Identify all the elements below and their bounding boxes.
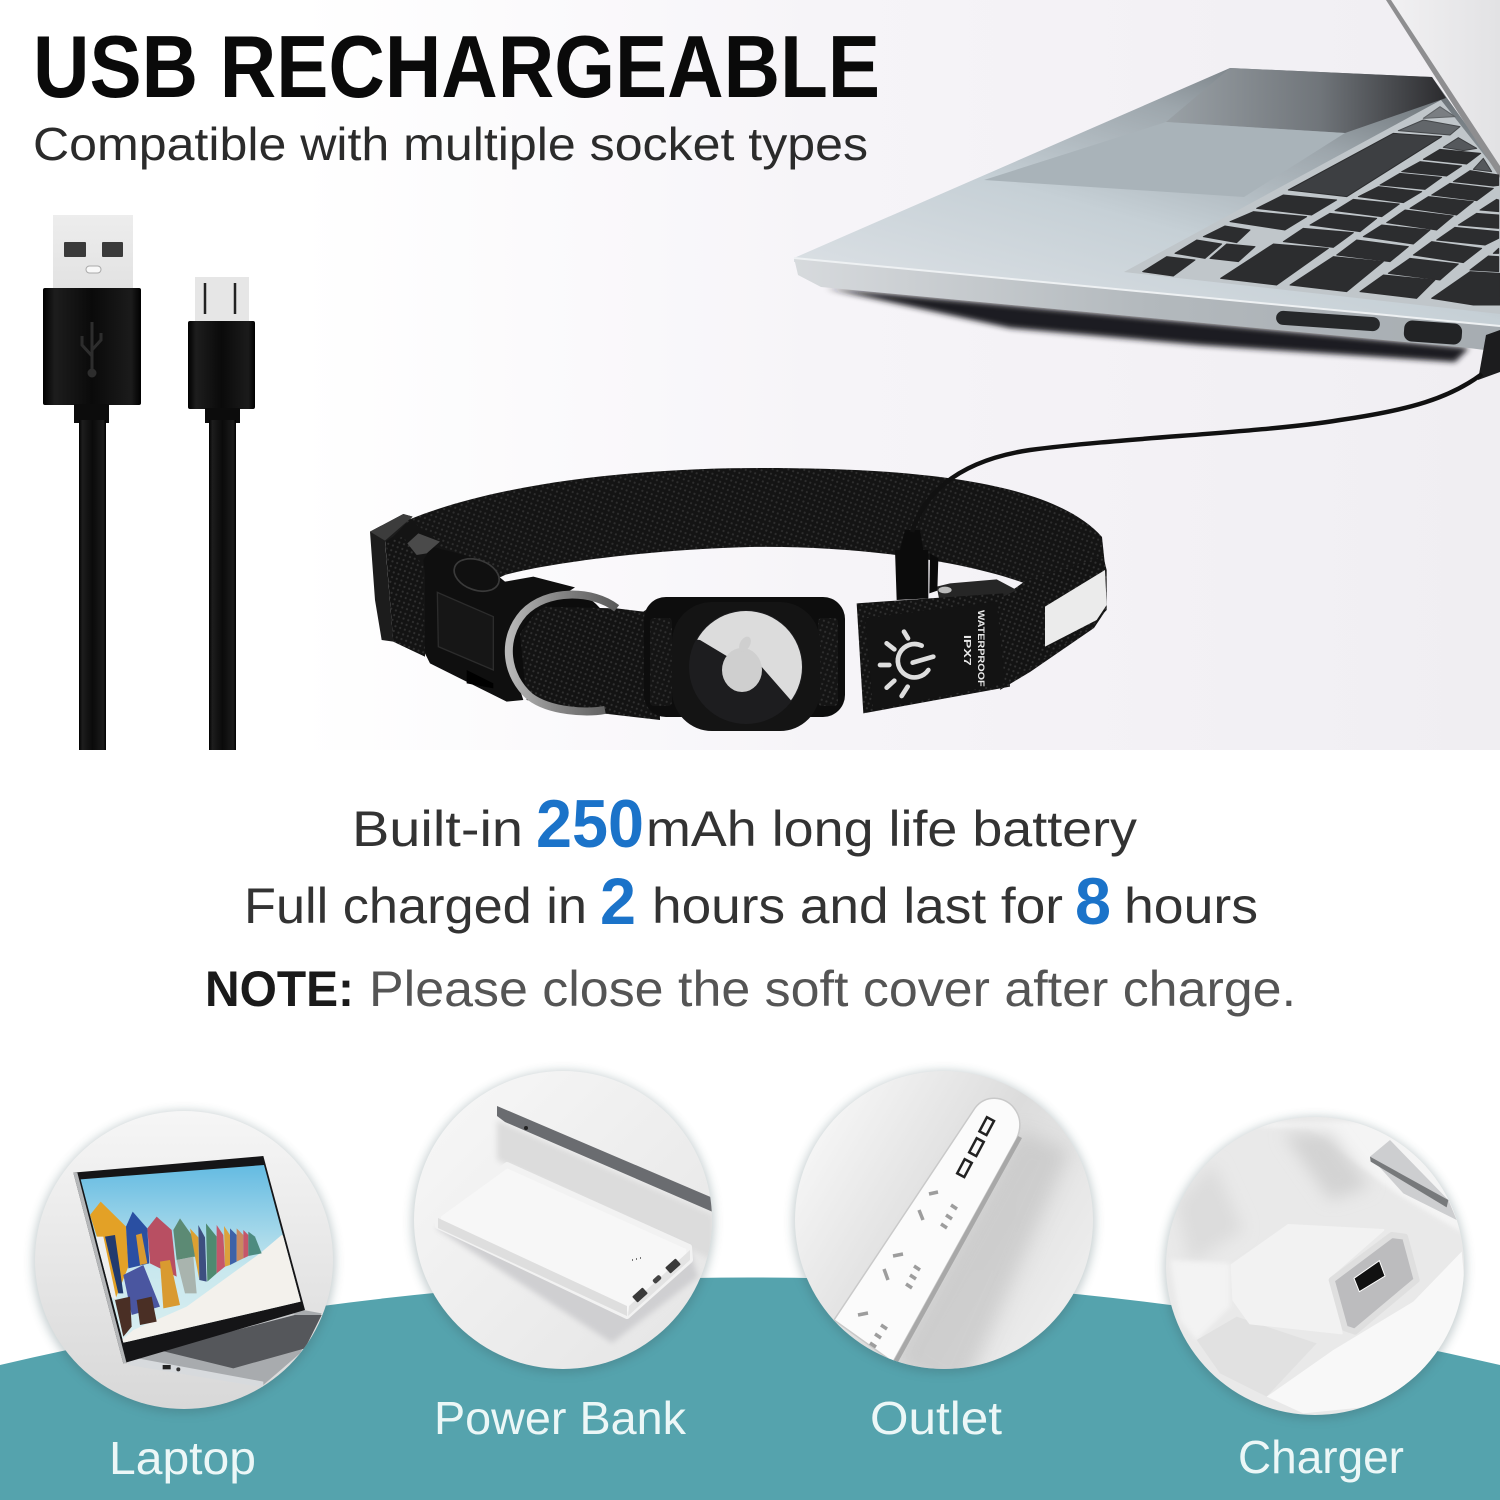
- charge time line: 2: [600, 864, 636, 938]
- battery line: mAh long life battery: [646, 801, 1137, 857]
- circle: power bank: [412, 1071, 714, 1373]
- airtag holder: [644, 590, 845, 731]
- battery line: 250: [536, 786, 644, 862]
- teal wave: [0, 1278, 1500, 1500]
- battery line: Built-in: [352, 801, 523, 857]
- label: power bank: Power Bank: [434, 1392, 687, 1444]
- usb type-a cable: [43, 215, 141, 750]
- charge time line: Full charged in: [244, 878, 587, 934]
- subtitle: Compatible with multiple socket types: [33, 118, 868, 170]
- charge time line: [244, 864, 1258, 938]
- charge time line: hours: [1124, 878, 1258, 934]
- charging cord: [912, 374, 1482, 532]
- title: USB RECHARGEABLE: [33, 17, 880, 116]
- label: charger: Charger: [1238, 1431, 1404, 1483]
- waterproof tag: [857, 530, 1017, 713]
- circle: laptop: [33, 1111, 335, 1413]
- note line: NOTE:: [205, 961, 354, 1017]
- label: laptop: Laptop: [109, 1432, 256, 1484]
- charger body: [1232, 1225, 1383, 1333]
- circle: outlet: [793, 1071, 1095, 1400]
- laptop: [794, 0, 1500, 380]
- charger face: [1332, 1235, 1417, 1332]
- charging plug: [895, 530, 938, 600]
- laptop lid: [73, 1156, 305, 1363]
- waterproof tag: WATERPROOF: [976, 610, 986, 687]
- collar: [370, 468, 1107, 731]
- micro usb cable: [188, 277, 255, 750]
- charge time line: 8: [1075, 864, 1111, 938]
- laptop base: [128, 1310, 322, 1385]
- hero photo panel: [0, 0, 1500, 750]
- note line: Please close the soft cover after charge.: [369, 961, 1296, 1017]
- socket holes: [858, 1192, 957, 1347]
- battery line: [352, 786, 1137, 862]
- d-ring: [509, 595, 617, 711]
- collar strap: [408, 468, 1106, 690]
- charge time line: hours and last for: [652, 878, 1063, 934]
- waterproof tag: IPX7: [961, 635, 972, 666]
- keyboard keys: [1143, 107, 1500, 305]
- right strap end with reflective strip: [1003, 557, 1107, 687]
- circle: charger: [1164, 1117, 1466, 1419]
- buckle and webbing: [370, 514, 660, 720]
- label: outlet: Outlet: [870, 1392, 1002, 1444]
- usb ports: [957, 1117, 994, 1177]
